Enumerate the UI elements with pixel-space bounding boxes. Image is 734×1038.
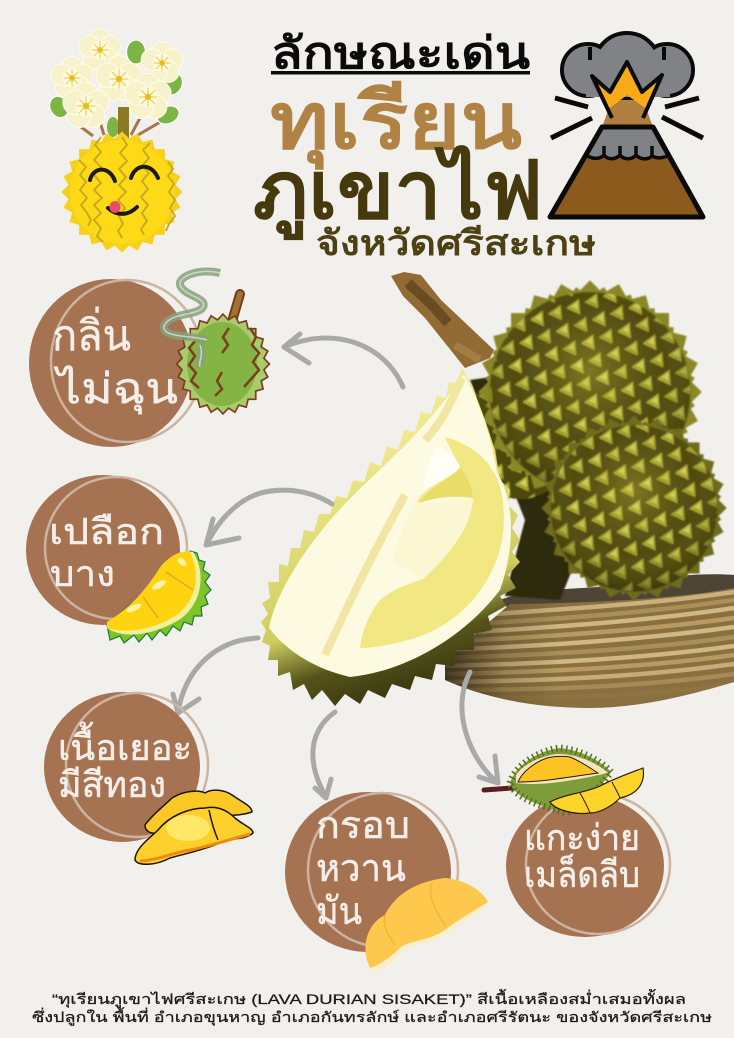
panel: crisp sweet creamy: หวาน — [316, 848, 406, 890]
arrows — [173, 334, 498, 798]
icon: pale durian flesh — [365, 878, 489, 973]
icon: golden flesh pieces — [135, 790, 253, 864]
stem — [391, 272, 494, 368]
panel: crisp sweet creamy: มัน — [316, 891, 362, 933]
panel: easy to peel, small seeds: เมล็ดลีบ — [524, 852, 640, 895]
panel: smell: กลิ่น — [52, 307, 131, 359]
panel: thin rind: บาง — [50, 553, 115, 594]
panel: thin rind: เปลือก — [49, 511, 164, 552]
durian rear mass — [464, 370, 600, 600]
panel: easy to peel, small seeds — [506, 794, 670, 937]
heading: province: จังหวัดศรีสะเกษ — [316, 224, 596, 263]
footer note — [32, 989, 712, 1026]
heading: volcano: ภูเขาไฟ — [253, 144, 543, 241]
title block — [253, 29, 596, 263]
footer line 2: ซึ่งปลูกใน พื้นที่ อำเภอขุนหาญ อำเภอกันทรลักษ์ และอำเภอศรีรัตนะ ของจังหวัดศรีสะเกษ — [32, 1007, 712, 1026]
panel: golden flesh: เนื้อเยอะ — [58, 721, 192, 768]
panel: golden flesh: มีสีทอง — [58, 764, 166, 805]
panel: crisp sweet creamy: กรอบ — [316, 805, 410, 847]
heading: distinctive features: ลักษณะเด่น — [271, 29, 530, 78]
volcano cone — [550, 127, 703, 217]
volcano lava — [592, 62, 662, 127]
arrow to easy peel — [462, 672, 498, 783]
arrow to smell — [284, 334, 403, 387]
main photo: durians in basket — [261, 272, 734, 715]
panel: smell: ไม่ฉุน — [54, 365, 178, 415]
panel: crisp sweet creamy — [285, 792, 458, 952]
eruption rays — [551, 98, 703, 138]
volcano smoke — [562, 33, 693, 99]
icon: opened durian with flesh — [484, 748, 643, 813]
whole durian, upper — [471, 273, 709, 511]
icon: durian segment — [107, 551, 211, 643]
arrow to flesh — [173, 638, 258, 713]
whole durian, lower — [535, 409, 733, 607]
basket rim — [500, 574, 734, 610]
panel: smell — [29, 279, 203, 447]
icon: green durian with smell — [164, 271, 271, 415]
arrow to crisp — [313, 712, 335, 798]
panel: easy to peel, small seeds: แกะง่าย — [524, 817, 640, 858]
footer line 1: “ทุเรียนภูเขาไฟศรีสะเกษ (LAVA DURIAN SISAKET)” สีเนื้อเหลืองสม่ำเสมอทั้งผล — [52, 989, 686, 1008]
heading: durian: ทุเรียน — [270, 77, 522, 170]
panel: thin rind — [26, 475, 187, 625]
durian flesh — [360, 437, 504, 648]
arrow to rind — [206, 490, 332, 545]
icon: volcano — [550, 33, 703, 217]
cut durian half — [261, 368, 520, 706]
basket weave — [445, 588, 734, 708]
icon: smiling durian with flowers — [46, 29, 186, 253]
panel: golden flesh — [44, 692, 208, 842]
